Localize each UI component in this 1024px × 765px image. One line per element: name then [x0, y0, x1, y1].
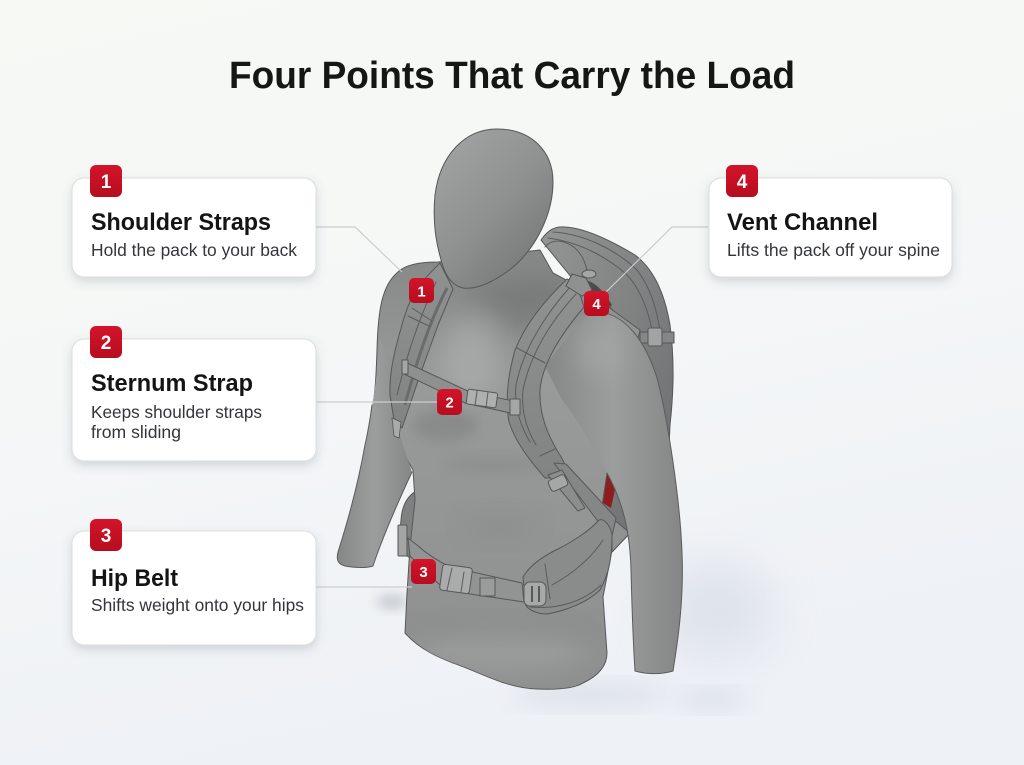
leader lines	[316, 227, 708, 587]
card 1 heading: Shoulder Straps	[91, 209, 271, 236]
backpack body	[541, 227, 674, 552]
hip belt	[398, 520, 612, 614]
card 4: vent channel	[709, 165, 952, 277]
card 3 heading: Hip Belt	[91, 565, 178, 592]
card 1: shoulder straps	[72, 165, 316, 277]
title: Four Points That Carry the Load	[229, 55, 795, 97]
marker 2 on figure: 2	[445, 394, 454, 412]
card 2 description: Keeps shoulder straps	[91, 402, 262, 422]
card 3 badge	[90, 519, 122, 551]
card 1 badge: 1	[101, 172, 112, 193]
card 1 description: Hold the pack to your back	[91, 240, 297, 260]
card 3 description: Shifts weight onto your hips	[91, 595, 304, 615]
marker 4 on figure	[584, 291, 609, 316]
lower strap webbing and adjuster	[547, 463, 616, 536]
red vent mesh	[593, 467, 617, 508]
lower pack corner	[612, 518, 630, 552]
torso and neck	[370, 250, 640, 689]
card 2 heading: Sternum Strap	[91, 370, 253, 397]
right shoulder strap	[507, 270, 596, 478]
marker 3 on figure: 3	[419, 564, 428, 581]
right arm	[545, 312, 682, 674]
sternum strap with buckle	[402, 360, 520, 415]
left shoulder strap	[390, 263, 453, 438]
belt slider	[524, 582, 546, 606]
marker 1 on figure	[409, 278, 434, 303]
head	[434, 129, 553, 288]
marker 2 on figure	[437, 389, 462, 415]
left forearm	[337, 340, 412, 568]
floor shadows	[376, 560, 775, 708]
marker 1 on figure: 1	[417, 284, 426, 300]
chest shading	[413, 274, 564, 682]
side buckle	[640, 328, 674, 346]
card 2 description	[91, 402, 262, 442]
card 1 badge	[90, 165, 122, 197]
center buckle	[439, 564, 473, 594]
figure: mannequin wearing backpack	[337, 129, 682, 689]
card 3 badge: 3	[101, 526, 111, 547]
marker 4 on figure: 4	[592, 296, 601, 313]
card 4 badge	[726, 165, 758, 197]
card 2 badge	[90, 326, 122, 358]
card 2 badge: 2	[101, 333, 111, 354]
card 4 badge: 4	[737, 172, 748, 193]
card 4 description: Lifts the pack off your spine	[727, 240, 940, 260]
left hip pad	[398, 490, 420, 558]
card 3: hip belt	[72, 519, 316, 645]
marker 3 on figure	[411, 559, 436, 584]
card 4 heading: Vent Channel	[727, 209, 878, 236]
card 2 description: from sliding	[91, 422, 181, 442]
card 2: sternum strap	[72, 326, 316, 461]
